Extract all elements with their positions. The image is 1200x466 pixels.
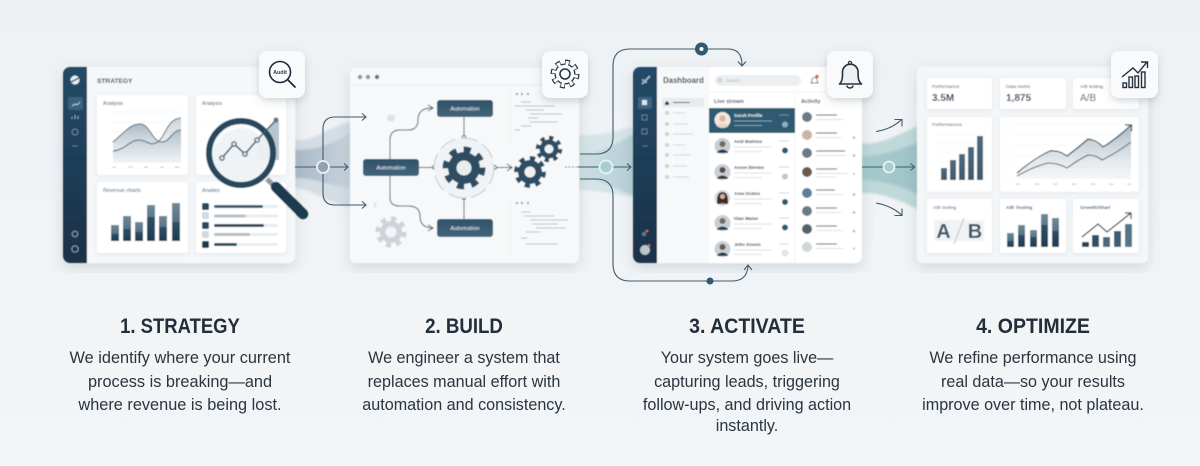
- card: a/b metric: A/B testing: [1080, 84, 1104, 90]
- card: a/b metric: [1073, 78, 1139, 109]
- card: performance metric: 3.5M: [932, 93, 954, 104]
- card: analysis line chart: [196, 95, 286, 175]
- card: a/b testing: B: [968, 221, 982, 243]
- step 4: optimize: real data—so your results: [941, 372, 1125, 391]
- card: a/b metric: A/B: [1080, 93, 1096, 104]
- automation box bottom: Automation: [450, 226, 480, 232]
- step 4: optimize: improve over time, not plateau.: [922, 395, 1144, 414]
- card: analysis area chart: Feb: [128, 165, 133, 169]
- card: analysis area chart: Analysis: [103, 101, 123, 107]
- build window dots: [350, 75, 579, 85]
- selected row: Sarah Profile: [734, 113, 763, 118]
- card: analysis line chart: Analysis: [202, 101, 222, 107]
- card: a/b testing: A/B testing: [933, 205, 957, 211]
- card: performances bar chart: Performances: [932, 122, 962, 128]
- connectors between automation and gear: [390, 105, 512, 231]
- step 3: activate: instantly.: [716, 416, 778, 435]
- flow band: activate to optimize: [860, 125, 919, 210]
- icon: bell: [827, 51, 873, 98]
- card: growth line chart: Aug: [1109, 182, 1114, 186]
- card: a/b testing: [927, 199, 992, 253]
- code block top: [510, 90, 562, 255]
- row: Arson Birnies: [714, 164, 789, 180]
- central gear: [434, 138, 494, 198]
- automation box left: Automation: [376, 166, 406, 172]
- activity column: Activity: [801, 99, 820, 105]
- step 4: optimize: [922, 315, 1144, 414]
- card: analysis area chart: Mar: [144, 165, 149, 169]
- card: growth line chart: Jan: [1016, 182, 1021, 186]
- card: analysis area chart: [97, 95, 188, 175]
- card: a/b testing bars: A/B Testing: [1006, 205, 1032, 211]
- activate nav column: Dashboard: [663, 76, 704, 85]
- row: Hian Maise: Hian Maise: [734, 216, 758, 221]
- faint decoration gear and dots: [374, 114, 404, 245]
- activate search bar: Search...: [726, 78, 744, 83]
- card: growth line chart: Mar: [1072, 182, 1077, 186]
- step 3: activate: follow-ups, and driving action: [643, 395, 851, 414]
- node: build to activate: [600, 160, 612, 174]
- strategy sidebar: [63, 67, 87, 263]
- step 2: build: replaces manual effort with: [368, 372, 560, 391]
- row: John Doson: John Doson: [734, 242, 761, 247]
- node: bottom connector: [706, 278, 714, 284]
- arrows: activate to optimize: [862, 120, 914, 216]
- card: growth line chart: [1000, 117, 1139, 192]
- step 3: activate: capturing leads, triggering: [654, 372, 840, 391]
- card: analies list: Analies: [202, 188, 220, 194]
- row: Area Dratos: [714, 190, 789, 206]
- step 3: activate: 3. ACTIVATE: [689, 315, 805, 338]
- card: growth chart: [1073, 199, 1139, 253]
- step 4: optimize: We refine performance using: [929, 348, 1137, 367]
- live stream column: [709, 99, 795, 257]
- node: top connector: [695, 42, 708, 56]
- card: analysis area chart: May: [175, 165, 181, 169]
- step 4: optimize: 4. OPTIMIZE: [976, 315, 1090, 338]
- row: Avid Malmos: [714, 138, 789, 154]
- card: performance metric: Performance: [932, 84, 960, 90]
- card: revenue charts: [97, 182, 188, 253]
- panel: strategy: [63, 67, 303, 263]
- row: Avid Malmos: Avid Malmos: [734, 139, 763, 144]
- node: activate to optimize: [884, 162, 894, 172]
- flow band: build to activate: [577, 127, 635, 197]
- card: data metric: 1,875: [1006, 93, 1031, 104]
- code block bottom: [516, 202, 568, 244]
- card: growth line chart: Jun: [1127, 182, 1132, 186]
- arrows: strategy to build: [295, 114, 366, 208]
- activity column: [801, 99, 855, 252]
- magnifying glass: [209, 117, 303, 214]
- card: analysis area chart: Jan: [112, 165, 117, 169]
- icon: growth chart: [1111, 51, 1158, 98]
- small gears: [516, 138, 560, 186]
- live stream column: Live stream: [714, 99, 744, 105]
- card: growth line chart: Mar: [1035, 182, 1040, 186]
- step 1: strategy: 1. STRATEGY: [120, 315, 240, 338]
- step 3: activate: Your system goes live—: [661, 348, 834, 367]
- step 2: build: 2. BUILD: [425, 315, 503, 338]
- activate search bar: [709, 75, 862, 263]
- step 3: activate: [643, 315, 851, 435]
- card: a/b testing: A: [936, 221, 951, 243]
- panel: build: [350, 68, 579, 263]
- row: Hian Maise: [714, 215, 789, 231]
- icon: audit: Audit: [273, 70, 287, 76]
- icon: gear: [542, 51, 588, 98]
- card: data metric: Data metric: [1006, 84, 1031, 90]
- activate sidebar: [633, 67, 657, 263]
- card: data metric: [1000, 78, 1066, 109]
- automation box top: Automation: [450, 106, 480, 112]
- step 2: build: automation and consistency.: [362, 395, 566, 414]
- card: analysis area chart: Apr: [160, 165, 164, 169]
- step 1: strategy: [70, 315, 291, 414]
- panel: activate: [633, 67, 862, 263]
- arrows: build to activate: [578, 49, 752, 281]
- automation box left: [363, 159, 419, 176]
- strategy sidebar icons: [68, 76, 83, 252]
- row: Arson Birnies: Arson Birnies: [734, 165, 765, 170]
- step 2: build: We engineer a system that: [368, 348, 560, 367]
- selected row: [709, 108, 795, 133]
- activate nav column: [657, 67, 709, 263]
- card: a/b testing bars: [1000, 199, 1066, 253]
- card: revenue charts: Revenue charts: [103, 188, 141, 194]
- card: performance metric: [927, 78, 992, 109]
- strategy heading: STRATEGY: [97, 78, 133, 85]
- dotted output line: [565, 166, 578, 168]
- automation box bottom: [437, 219, 493, 237]
- icon: audit: [259, 51, 305, 98]
- step 2: build: [362, 315, 566, 414]
- node: strategy to build: [317, 161, 329, 173]
- card: growth line chart: Feb: [1053, 182, 1058, 186]
- card: analies list: [196, 182, 286, 253]
- activate sidebar icons: [638, 76, 652, 255]
- panel: optimize: [917, 67, 1148, 263]
- row: Area Dratos: Area Dratos: [734, 191, 760, 196]
- card: performances bar chart: [927, 117, 992, 192]
- card: growth line chart: Mar: [1091, 182, 1096, 186]
- card: growth chart: Growth/Shart: [1080, 205, 1111, 211]
- step 1: strategy: process is breaking—and: [88, 372, 272, 391]
- step 1: strategy: We identify where your current: [70, 348, 291, 367]
- step 1: strategy: where revenue is being lost.: [77, 395, 282, 414]
- flow band: strategy to build: [295, 122, 352, 207]
- automation box top: [437, 100, 493, 117]
- row: John Doson: [714, 241, 789, 257]
